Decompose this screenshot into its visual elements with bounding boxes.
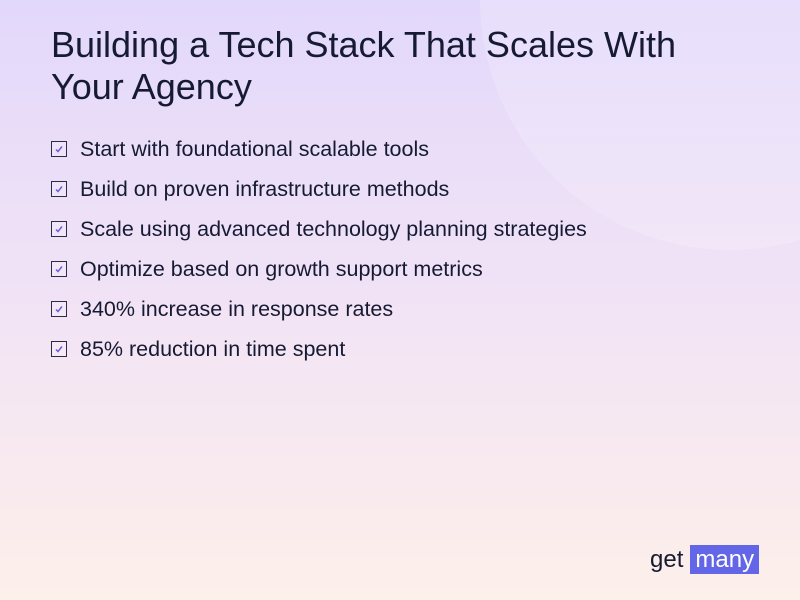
item 6: 85% reduction in time spent [80,336,345,360]
checklist [51,136,587,360]
item 3: Scale using advanced technology planning strategies [80,216,587,240]
logo: get [650,546,683,572]
logo [650,545,759,574]
item 2: Build on proven infrastructure methods [80,176,449,200]
item 4: Optimize based on growth support metrics [80,256,483,280]
item 1: Start with foundational scalable tools [80,136,429,160]
item 5: 340% increase in response rates [80,296,393,320]
logo: many [695,546,754,573]
title: Building a Tech Stack That Scales With Your Agency [51,24,676,107]
